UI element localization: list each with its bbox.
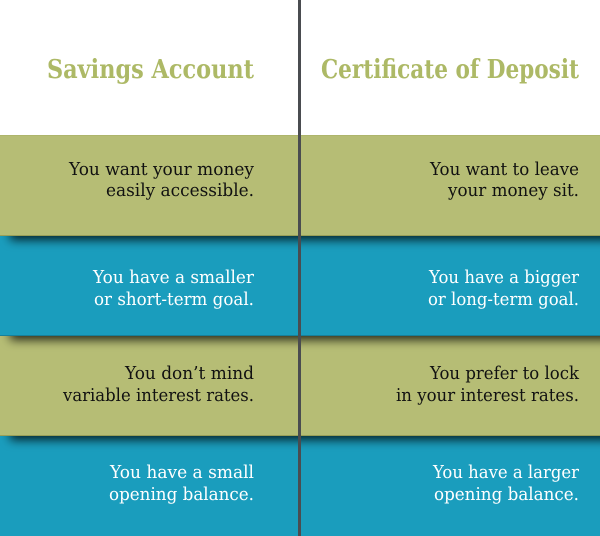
center divider bbox=[298, 0, 301, 536]
row 1: accessibility: your money sit. bbox=[447, 180, 579, 201]
row 2: goal: You have a smaller bbox=[92, 267, 254, 288]
row 4: opening balance: opening balance. bbox=[434, 484, 579, 505]
row 4: opening balance bbox=[0, 436, 600, 536]
row 2: goal: or long-term goal. bbox=[428, 289, 579, 310]
row 1: accessibility: You want your money bbox=[68, 159, 255, 180]
row 2: goal: You have a bigger bbox=[428, 267, 579, 288]
row 3: interest rates: variable interest rates. bbox=[62, 385, 254, 406]
row 3: interest rates bbox=[0, 336, 600, 436]
row 1: accessibility: easily accessible. bbox=[106, 180, 254, 201]
row 4: opening balance: You have a larger bbox=[432, 462, 579, 483]
row 2: goal: or short-term goal. bbox=[94, 289, 254, 310]
row 1: accessibility bbox=[0, 135, 600, 236]
row 3: interest rates: You don’t mind bbox=[124, 363, 254, 384]
heading: Savings Account: Savings Account bbox=[47, 55, 254, 85]
row 1: accessibility: You want to leave bbox=[429, 159, 579, 180]
row 3: interest rates: in your interest rates. bbox=[396, 385, 579, 406]
row 2: goal bbox=[0, 236, 600, 336]
row 3: interest rates: You prefer to lock bbox=[429, 363, 580, 384]
row 4: opening balance: You have a small bbox=[109, 462, 254, 483]
row 4: opening balance: opening balance. bbox=[109, 484, 254, 505]
